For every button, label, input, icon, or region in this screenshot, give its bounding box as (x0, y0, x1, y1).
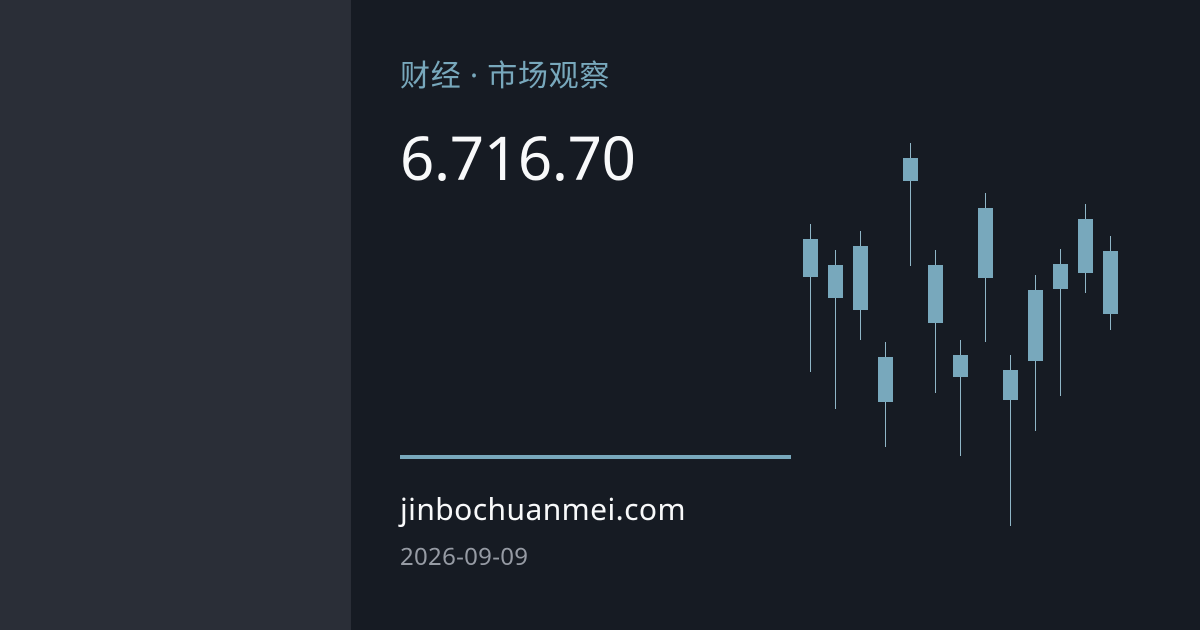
left side panel (0, 0, 351, 630)
headline value: 6.716.70 (400, 116, 636, 198)
accent divider (400, 455, 791, 459)
website domain: jinbochuanmei.com (400, 488, 686, 529)
heading: category label: 财经 · 市场观察 (400, 54, 610, 95)
publication date: 2026-09-09 (400, 540, 528, 573)
